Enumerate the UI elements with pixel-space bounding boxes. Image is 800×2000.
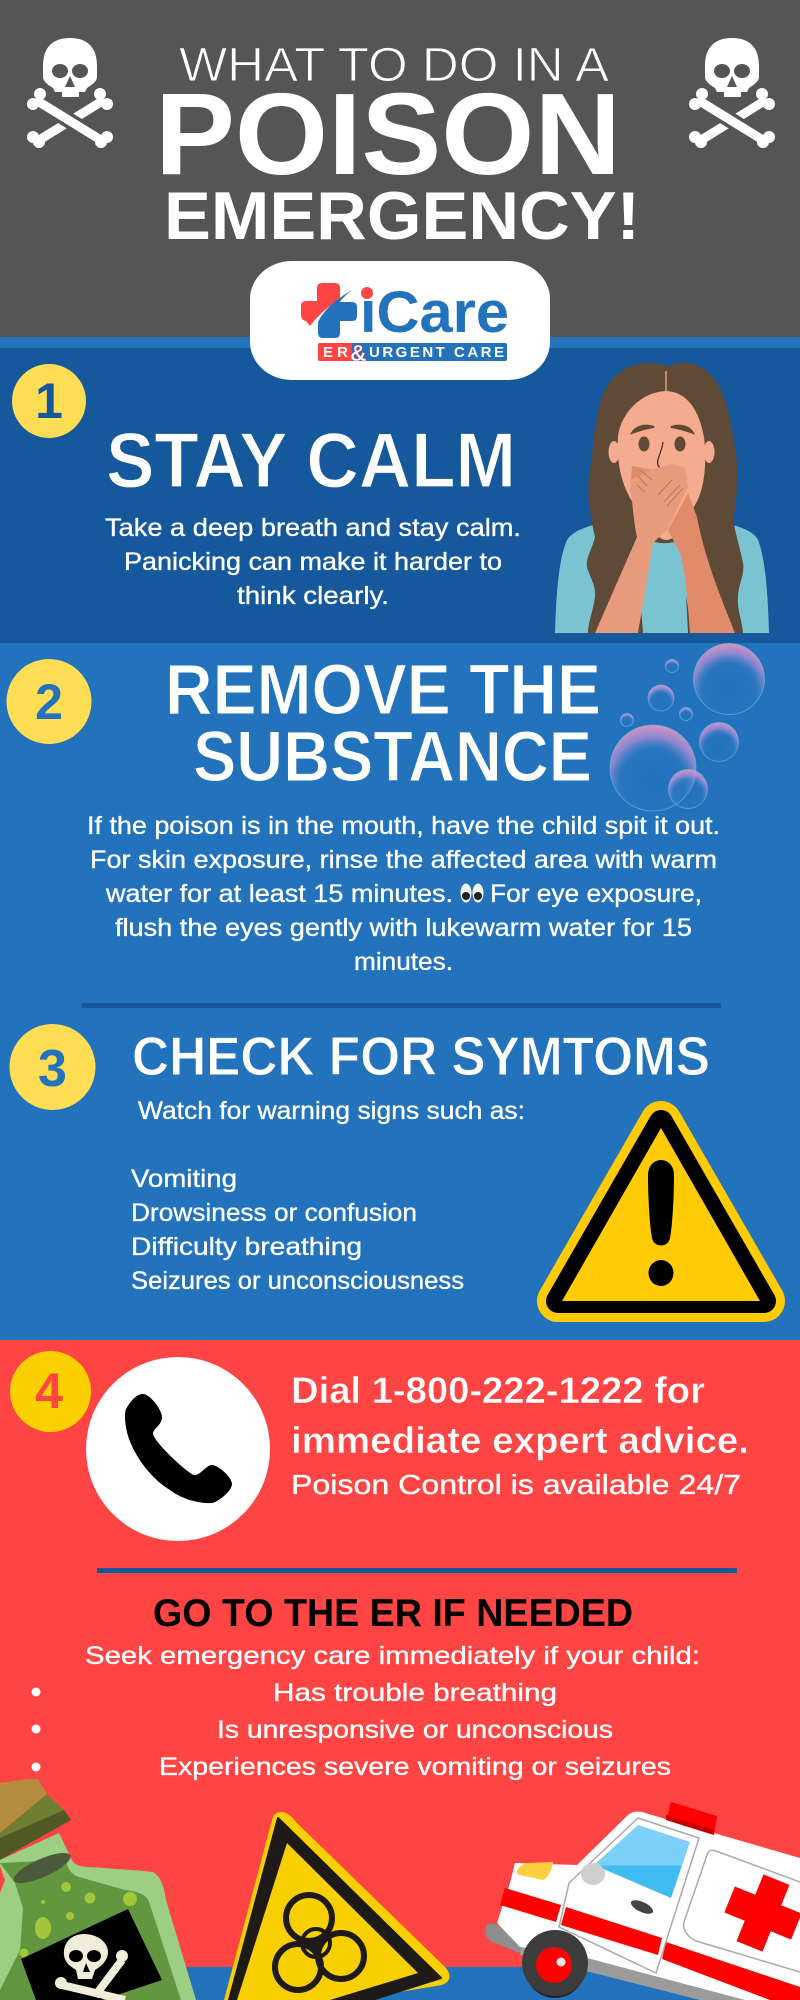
badge: number 4 (10, 1351, 91, 1432)
text block: remove the substance: minutes. (354, 948, 453, 976)
icon: skull and crossbones left (27, 38, 113, 148)
logo tagline (318, 340, 507, 366)
badge: number 3: 3 (38, 1040, 67, 1098)
badge: number 4: 4 (35, 1363, 63, 1419)
heading: remove the substance (165, 651, 601, 797)
badge: number 3 (10, 1024, 96, 1110)
text block: warning signs: Drowsiness or confusion (131, 1199, 417, 1227)
title: POISON (155, 69, 621, 199)
icon: biohazard sign (224, 1812, 449, 2000)
text block: warning signs: Difficulty breathing (131, 1233, 362, 1261)
badge: number 2: 2 (35, 674, 63, 730)
illustration: ambulance (485, 1802, 800, 2000)
badge: number 1 (12, 364, 86, 438)
text block: warning signs: Watch for warning signs such as: (138, 1097, 525, 1125)
icon: skull and crossbones right (689, 38, 775, 148)
title: EMERGENCY! (164, 178, 640, 254)
text block: call poison control (291, 1370, 749, 1500)
text block: warning signs: Vomiting (131, 1165, 237, 1193)
title (155, 39, 640, 254)
text block: ER criteria (32, 1642, 700, 1781)
text block: stay calm: Take a deep breath and stay calm. (105, 514, 521, 542)
heading: check for symtoms: CHECK FOR SYMTOMS (132, 1025, 710, 1087)
icon: red cross (716, 1866, 800, 1960)
text block: warning signs: Seizures or unconsciousness (131, 1267, 464, 1295)
logo tagline: ER (323, 344, 348, 361)
text block: call poison control: Poison Control is available 24/7 (291, 1469, 741, 1500)
text block: warning signs (131, 1097, 525, 1295)
title: WHAT TO DO IN A (179, 39, 609, 92)
text block: stay calm: Panicking can make it harder to (124, 548, 502, 576)
heading: stay calm: STAY CALM (106, 416, 516, 504)
panel: step 1 stay calm (0, 337, 800, 643)
panel: header (0, 0, 800, 337)
logo card (250, 261, 550, 380)
badge: number 2 (6, 659, 92, 744)
icon: label skull (55, 1934, 128, 2000)
heading: remove the substance: REMOVE THE (165, 651, 601, 730)
text block: ER criteria: Has trouble breathing (273, 1679, 557, 1707)
heading: go to the ER: GO TO THE ER IF NEEDED (153, 1592, 633, 1635)
text block: remove the substance (87, 812, 720, 976)
icon: soap bubbles (610, 644, 764, 811)
icon: phone (86, 1357, 270, 1541)
heading: remove the substance: SUBSTANCE (193, 718, 592, 797)
text block: ER criteria: Experiences severe vomiting or seizures (159, 1753, 671, 1781)
icon: eyes emoji (460, 884, 484, 902)
badge: number 1: 1 (35, 373, 63, 429)
illustration: poison bottle (0, 1779, 196, 2000)
panel: step 4 and ER (0, 1340, 800, 2000)
panel: steps 2 and 3 (0, 643, 800, 1340)
logo wordmark: iCare (360, 280, 509, 345)
text block: remove the substance: If the poison is in the mouth, have the child spit it out. (87, 812, 720, 840)
illustration: woman covering mouth (555, 362, 769, 633)
icon: warning triangle (558, 1122, 764, 1301)
text block: call poison control: Dial 1-800-222-1222 for (291, 1370, 705, 1411)
text block: ER criteria: Is unresponsive or unconscious (217, 1716, 613, 1744)
icon: medical cross (301, 283, 357, 338)
logo tagline: URGENT CARE (369, 344, 504, 361)
text block: stay calm: think clearly. (237, 582, 389, 610)
text block: remove the substance: water for at least 15 minutes. (105, 880, 453, 908)
text block: remove the substance: For eye exposure, (490, 880, 702, 908)
text block: stay calm (105, 514, 521, 610)
logo tagline: & (350, 340, 367, 366)
text block: remove the substance: For skin exposure, rinse the affected area with warm (90, 846, 717, 874)
text block: remove the substance: flush the eyes gently with lukewarm water for 15 (115, 914, 692, 942)
text block: ER criteria: Seek emergency care immediately if your child: (85, 1642, 700, 1670)
text block: call poison control: immediate expert advice. (291, 1420, 749, 1461)
